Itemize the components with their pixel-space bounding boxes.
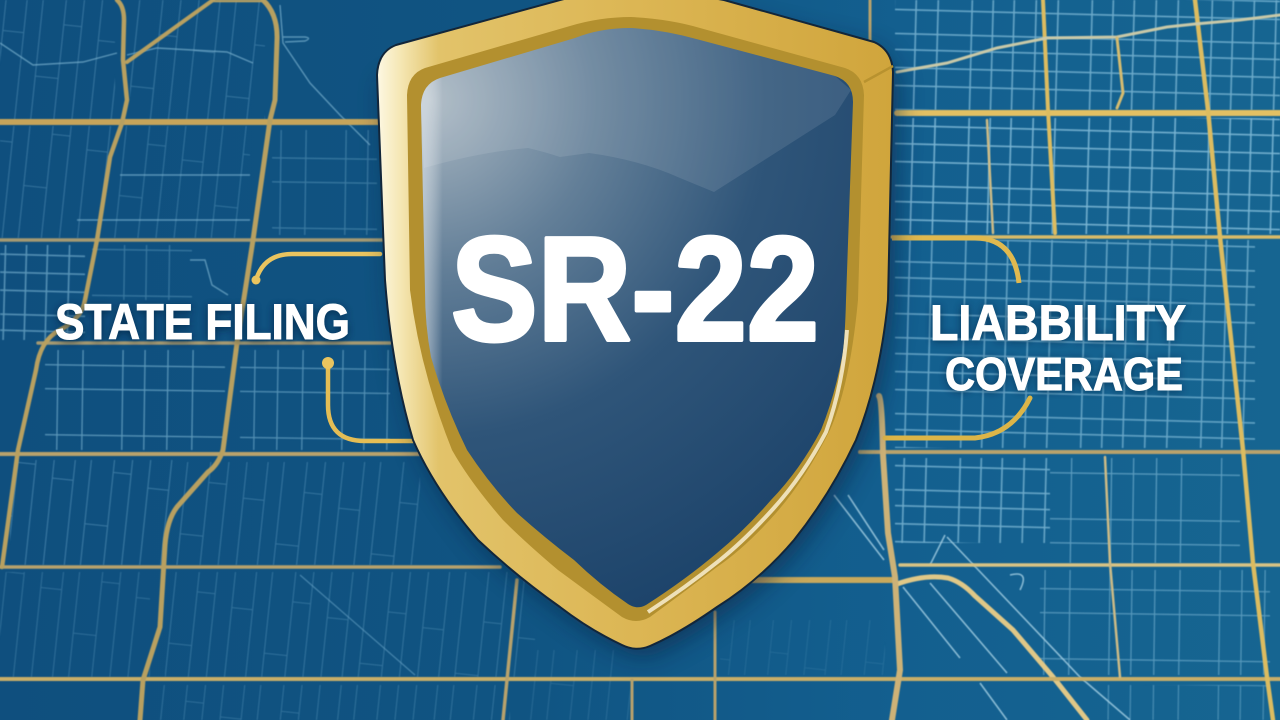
label: liability coverage: LIABBILITY — [930, 296, 1186, 352]
inner ring — [407, 17, 864, 621]
label: liability coverage: COVERAGE — [945, 348, 1183, 400]
label: liability coverage — [930, 295, 1186, 401]
gold frame — [377, 0, 893, 649]
label: liability coverage: LIABBILITY — [930, 295, 1186, 351]
callout connector: state filing upper — [252, 254, 380, 284]
label: liability coverage: COVERAGE — [945, 349, 1183, 401]
gloss highlight — [421, 28, 851, 192]
callout connector: state filing lower — [322, 357, 418, 441]
shield shadow — [383, 0, 899, 657]
callout connector: liability upper — [892, 238, 1019, 283]
shield — [377, 0, 899, 657]
panel bevel — [421, 28, 853, 607]
title: SR-22: SR-22 — [451, 207, 819, 372]
corner bevel — [864, 66, 893, 82]
callout connector: liability lower — [885, 398, 1030, 438]
ring highlight — [648, 330, 847, 612]
dark panel — [421, 28, 853, 607]
label: state filing: STATE FILING — [55, 296, 350, 352]
label: state filing: STATE FILING — [55, 294, 350, 350]
